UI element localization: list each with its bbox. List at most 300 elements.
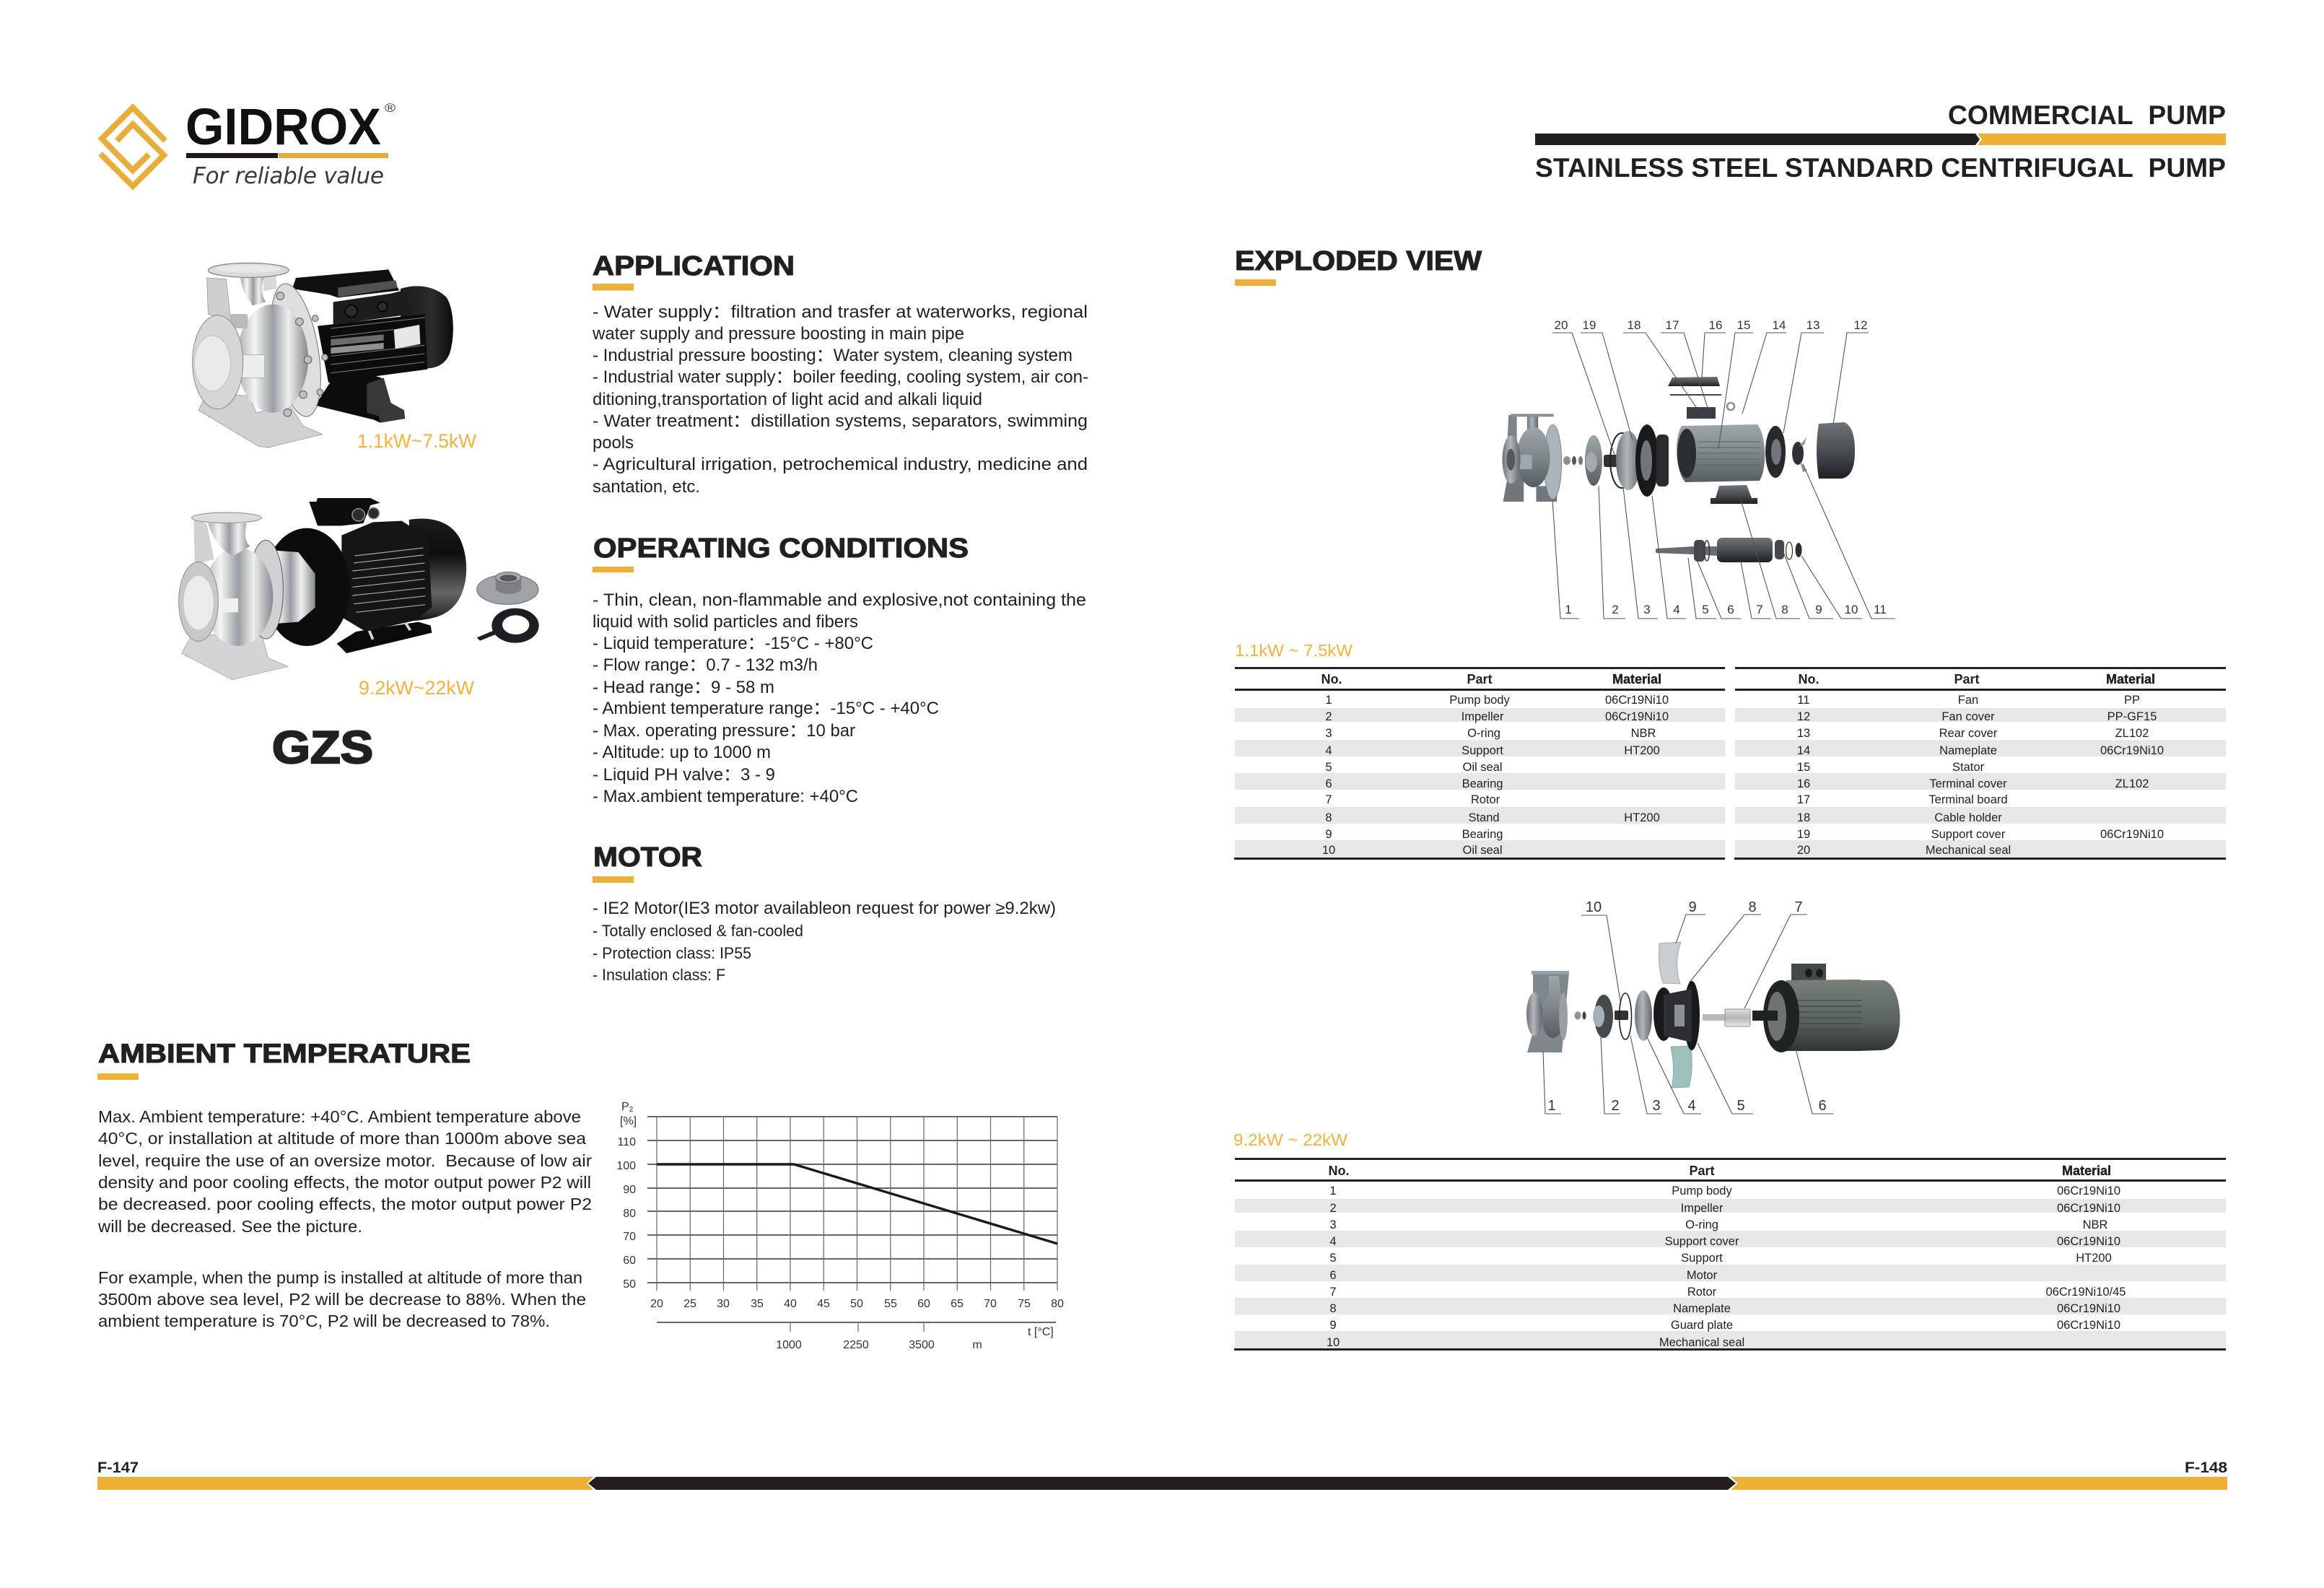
y axis labels: 110 (617, 1136, 636, 1148)
pump casing (1502, 414, 1562, 502)
row 10 (1327, 1336, 1744, 1349)
mechanical seal (1615, 1011, 1628, 1020)
row 7 (1325, 793, 1500, 806)
header row: No. (1328, 1164, 1350, 1178)
row 11 (1797, 694, 2140, 707)
accessory gasket (477, 608, 539, 643)
row 3: O-ring (1685, 1218, 1718, 1231)
paragraph: derating explanation: Max. Ambient temperature: +40°C. Ambient temperature above (98, 1107, 581, 1126)
callout numbers: 18 (1628, 318, 1641, 332)
neck (208, 523, 250, 556)
callout numbers: 1 (1547, 1098, 1556, 1114)
motor (1752, 964, 1900, 1052)
row 7 (1329, 1286, 2126, 1299)
row 4: 06Cr19Ni10 (2057, 1235, 2120, 1248)
application list: - Industrial water supply：boiler feeding, cooling system, air con- (593, 367, 1088, 387)
row 13: Rear cover (1939, 727, 1998, 740)
row 2 (1329, 1202, 2120, 1215)
row 14: 06Cr19Ni10 (2100, 744, 2164, 757)
product photo: large pump 9.2kW-22kW (179, 498, 539, 680)
rear cover (1765, 426, 1786, 478)
row 1: Pump body (1672, 1185, 1732, 1197)
fan (1792, 437, 1807, 472)
power label: 9.2kW~22kW: 9.2kW~22kW (359, 677, 475, 699)
paragraph: example: For example, when the pump is installed at altitude of more than (98, 1268, 582, 1287)
row 8 (1325, 811, 1660, 824)
row 5: Oil seal (1462, 761, 1503, 774)
application list: ditioning,transportation of light acid and alkali liquid (593, 390, 982, 409)
callout numbers: 4 (1673, 603, 1680, 616)
fan cover (1817, 422, 1855, 479)
row 8: Stand (1468, 811, 1500, 824)
header row: Material (1612, 672, 1661, 686)
row 7: Rotor (1471, 793, 1500, 806)
footer (97, 1460, 2227, 1490)
top flange (192, 512, 261, 523)
heading: APPLICATION (593, 251, 795, 282)
header row (1321, 672, 1661, 686)
row 19 (1797, 828, 2164, 841)
row bands (1235, 708, 1725, 858)
conditions list: - Max. operating pressure：10 bar (593, 721, 855, 741)
row 2: 2 (1325, 710, 1332, 723)
row 11: PP (2124, 694, 2140, 707)
inlet pipe (222, 598, 238, 612)
exploded diagram: 9.2kW-22kW (1526, 899, 1900, 1114)
row 19: 06Cr19Ni10 (2100, 828, 2164, 841)
terminal board (1670, 394, 1721, 396)
row 14 (1797, 744, 2164, 757)
row 7: 7 (1329, 1286, 1337, 1299)
altitude axis labels: 2250 (843, 1339, 869, 1351)
impeller (1585, 435, 1602, 486)
row 8: HT200 (1624, 811, 1660, 824)
support (1654, 981, 1700, 1050)
row 17: 17 (1797, 793, 1810, 806)
base (182, 634, 288, 680)
cable holder (1687, 407, 1716, 419)
row 4: 4 (1329, 1235, 1337, 1248)
header row: Material (2106, 672, 2155, 686)
row 9: 9 (1329, 1319, 1337, 1332)
temperature axis labels: 65 (951, 1298, 964, 1310)
row 3: O-ring (1467, 727, 1500, 740)
row 9: Guard plate (1671, 1319, 1733, 1332)
pump casing (1526, 971, 1569, 1052)
row 13: 13 (1797, 727, 1810, 740)
terminal box (309, 498, 380, 525)
table: parts 11-20 (1734, 667, 2226, 860)
row 6 (1329, 1269, 1718, 1282)
product photo: small pump 1.1kW-7.5kW (193, 263, 453, 448)
terminal box (292, 269, 413, 325)
heading accent (593, 284, 634, 290)
temperature axis labels: 50 (850, 1298, 863, 1310)
icon: gold interlocking diamond (100, 108, 165, 186)
row 3: NBR (2083, 1218, 2107, 1231)
conditions list: - Liquid temperature：-15°C - +80°C (593, 634, 873, 653)
rotor assembly (1656, 538, 1801, 562)
temperature axis labels: 20 (650, 1298, 663, 1310)
conditions list: - Head range：9 - 58 m (593, 678, 774, 697)
motor list (593, 899, 1056, 984)
conditions list: - Altitude: up to 1000 m (593, 743, 771, 762)
conditions list: - Thin, clean, non-flammable and explosive,not containing the (593, 590, 1086, 610)
paragraph: derating explanation: 40°C, or installation at altitude of more than 1000m above sea (98, 1129, 586, 1148)
table: parts for 9.2kW-22kW (1234, 1158, 2226, 1351)
temperature axis labels: 40 (784, 1298, 797, 1310)
row 15 (1797, 761, 1985, 774)
volute (204, 547, 273, 646)
callout numbers: 8 (1781, 603, 1788, 616)
row 4 (1329, 1235, 2120, 1248)
row 12: PP-GF15 (2107, 710, 2157, 723)
altitude axis labels (776, 1326, 1054, 1351)
section heading: exploded view (1235, 246, 1482, 286)
page number left: F-147 (97, 1460, 139, 1476)
row 10: Oil seal (1462, 844, 1503, 857)
callout numbers: 15 (1737, 318, 1750, 332)
row 13: ZL102 (2115, 727, 2149, 740)
callout numbers: 13 (1807, 318, 1820, 332)
callout numbers: 10 (1586, 899, 1602, 915)
section: operating conditions (593, 533, 1086, 806)
header: product category (1535, 100, 2226, 183)
row 3: NBR (1631, 727, 1656, 740)
application list: water supply and pressure boosting in main pipe (592, 324, 964, 344)
heading accent (97, 1073, 139, 1080)
row 6: Bearing (1462, 777, 1503, 790)
volute (237, 305, 308, 413)
application list: pools (593, 433, 634, 453)
callout numbers: 19 (1583, 318, 1596, 332)
section: motor (593, 842, 1056, 984)
motor foot (337, 622, 432, 653)
row 17 (1797, 793, 2008, 806)
temperature axis labels: 45 (817, 1298, 830, 1310)
row 10: 10 (1327, 1336, 1340, 1349)
row 10: 10 (1322, 844, 1335, 857)
paragraph: derating explanation: be decreased. poor cooling effects, the motor output power P2 (98, 1195, 592, 1213)
callout numbers: 20 (1555, 318, 1568, 332)
row bands (1235, 1199, 2226, 1349)
heading accent (593, 567, 634, 572)
row 3 (1325, 727, 1656, 740)
motor ribs (331, 318, 424, 373)
paragraph: derating explanation: level, require the use of an oversize motor. Because of low air (98, 1151, 592, 1170)
volute flange (248, 540, 283, 639)
row 2: 2 (1329, 1202, 1337, 1215)
chart grid (647, 1117, 1057, 1291)
row 18: Cable holder (1934, 811, 2002, 824)
temperature axis labels: 80 (1051, 1298, 1064, 1310)
temperature axis labels: 35 (751, 1298, 764, 1310)
row 10 (1322, 844, 1503, 857)
row 6: Motor (1687, 1269, 1718, 1282)
callout numbers: 7 (1794, 899, 1803, 915)
application list: - Water treatment：distillation systems, separators, swimming (593, 411, 1088, 431)
terminal cover (1668, 377, 1720, 386)
row 16: ZL102 (2115, 777, 2149, 790)
y axis labels: 90 (623, 1184, 636, 1196)
row 8 (1329, 1302, 2120, 1315)
temperature axis labels: 70 (984, 1298, 997, 1310)
heading: EXPLODED VIEW (1235, 246, 1482, 276)
temperature axis labels: 75 (1018, 1298, 1031, 1310)
row 2: Impeller (1681, 1202, 1724, 1215)
leader lines (1552, 333, 1895, 619)
altitude axis (657, 1322, 1056, 1332)
leader lines (1543, 915, 1833, 1114)
row 1: 06Cr19Ni10 (2057, 1185, 2120, 1197)
row 8: 8 (1329, 1302, 1337, 1315)
stand (1711, 485, 1757, 504)
section: application (592, 251, 1088, 497)
row 1: 06Cr19Ni10 (1605, 694, 1669, 707)
callout numbers: 3 (1643, 603, 1651, 616)
base (198, 393, 323, 448)
conditions list: - Liquid PH valve：3 - 9 (593, 765, 775, 785)
row 15: 15 (1797, 761, 1810, 774)
row 8: 8 (1325, 811, 1332, 824)
row 5: Support (1681, 1252, 1723, 1265)
application list: - Water supply：filtration and trasfer at waterworks, regional (593, 302, 1088, 322)
row 9: 9 (1325, 828, 1332, 841)
callout numbers: 3 (1652, 1098, 1661, 1114)
header row: Material (2062, 1164, 2111, 1178)
row bands (1735, 708, 2226, 858)
logo rule (186, 153, 388, 158)
support cover (1616, 431, 1641, 490)
application list: santation, etc. (593, 477, 700, 497)
altitude axis labels: m (972, 1339, 982, 1351)
table rules (1234, 1158, 2226, 1351)
row 20 (1797, 844, 2011, 857)
callout numbers: 14 (1773, 318, 1786, 332)
y axis labels: P (621, 1101, 629, 1113)
y axis labels: 80 (623, 1208, 636, 1220)
O-ring (1610, 433, 1633, 488)
motor foot (315, 374, 405, 423)
title: commercial pump: COMMERCIAL PUMP (1948, 100, 2226, 130)
row 6 (1325, 777, 1503, 790)
inlet disc (183, 576, 214, 629)
motor list: - IE2 Motor(IE3 motor availableon request for power ≥9.2kw) (593, 899, 1056, 918)
paragraph: example (98, 1268, 586, 1330)
upper rib (230, 314, 248, 328)
row 14: Nameplate (1939, 744, 1997, 757)
footer bar (97, 1477, 2227, 1490)
mechanical seal (1604, 455, 1622, 467)
header row: No. (1799, 672, 1819, 686)
heading: OPERATING CONDITIONS (593, 533, 969, 564)
back flange (263, 280, 329, 420)
row 2: Impeller (1462, 710, 1504, 723)
callout numbers (1547, 899, 1827, 1114)
small parts (1575, 1012, 1586, 1019)
temperature axis labels: 55 (884, 1298, 897, 1310)
motor fan cover (409, 518, 466, 621)
derating curve (657, 1164, 1057, 1244)
application list (592, 302, 1088, 497)
callout numbers: 11 (1874, 603, 1887, 616)
table: parts 1-10 (1234, 667, 1725, 860)
row 6: 6 (1325, 777, 1332, 790)
row 5: 5 (1329, 1252, 1337, 1265)
motor fan cover (401, 286, 453, 370)
stator (1677, 424, 1765, 482)
row 4: Support cover (1665, 1235, 1739, 1248)
conditions list: liquid with solid particles and fibers (593, 612, 858, 632)
guard plate top (1659, 942, 1681, 984)
model name: GZS: GZS (272, 723, 373, 773)
paragraph: derating explanation (97, 1107, 592, 1236)
bracket (193, 518, 214, 564)
row 11: 11 (1797, 694, 1810, 707)
temperature axis labels: 25 (683, 1298, 696, 1310)
header row (1328, 1164, 2111, 1178)
application list: - Industrial pressure boosting：Water system, cleaning system (593, 346, 1073, 365)
row 7: 06Cr19Ni10/45 (2045, 1286, 2126, 1299)
row 7: 7 (1325, 793, 1332, 806)
support cover (1635, 990, 1652, 1041)
row 4: Support (1462, 744, 1503, 757)
lifting eye (1727, 403, 1734, 410)
application list: - Agricultural irrigation, petrochemical industry, medicine and (593, 455, 1088, 474)
paragraph: example: 3500m above sea level, P2 will be decrease to 88%. When the (98, 1290, 586, 1309)
callout numbers (1555, 318, 1887, 616)
callout numbers: 2 (1611, 1098, 1620, 1114)
logo: GIDROX brand (100, 99, 396, 189)
flange bolts (276, 292, 328, 416)
y axis labels: 100 (616, 1160, 636, 1172)
row 5: HT200 (2076, 1252, 2112, 1265)
row 9: 06Cr19Ni10 (2057, 1319, 2120, 1332)
callout numbers: 5 (1702, 603, 1709, 616)
section: ambient temperature (97, 1039, 592, 1330)
row 16 (1797, 777, 2149, 790)
callout numbers: 1 (1565, 603, 1572, 616)
power label: 1.1kW~7.5kW: 1.1kW~7.5kW (357, 430, 476, 452)
row 12: Fan cover (1941, 710, 1995, 723)
header row (1799, 672, 2155, 686)
callout numbers: 12 (1854, 318, 1867, 332)
motor body (341, 521, 432, 632)
O-ring (1620, 993, 1631, 1039)
y axis labels: [%] (620, 1115, 637, 1127)
motor list: - Insulation class: F (593, 966, 725, 984)
rotor shaft (1703, 1009, 1750, 1026)
table rules (1734, 667, 2226, 860)
y axis labels (616, 1101, 637, 1291)
row 15: Stator (1952, 761, 1985, 774)
inlet flange (193, 315, 243, 409)
altitude axis labels: t [°C] (1028, 1326, 1054, 1338)
wordmark: GIDROX: GIDROX (185, 99, 381, 156)
row 1 (1325, 694, 1669, 707)
row 9 (1325, 828, 1503, 841)
motor flange (263, 528, 350, 646)
y axis labels: 60 (623, 1255, 636, 1267)
row 2 (1325, 710, 1669, 723)
callout numbers: 9 (1688, 899, 1697, 915)
inlet pipe (242, 355, 265, 378)
callout numbers: 6 (1727, 603, 1734, 616)
row 4: 4 (1325, 744, 1332, 757)
range label: 1.1kW ~ 7.5kW: 1.1kW ~ 7.5kW (1235, 641, 1353, 660)
accessory flange (477, 572, 538, 604)
row 10: Mechanical seal (1659, 1336, 1744, 1349)
paragraph: derating explanation: will be decreased. See the picture. (97, 1217, 362, 1236)
row 7: Rotor (1687, 1286, 1717, 1299)
callout numbers: 7 (1756, 603, 1763, 616)
line chart: P2 derating vs temperature and altitude (616, 1101, 1064, 1351)
paragraph: example: ambient temperature is 70°C, P2 will be decreased to 78%. (98, 1312, 550, 1330)
motor list: - Protection class: IP55 (593, 944, 751, 962)
conditions list (593, 590, 1086, 806)
nameplate (394, 325, 420, 349)
row 1 (1329, 1185, 2120, 1197)
altitude axis labels: 1000 (776, 1339, 802, 1351)
temperature axis labels (650, 1298, 1064, 1310)
y axis labels: 70 (623, 1231, 636, 1243)
row 1: 1 (1329, 1185, 1337, 1197)
exploded diagram: 1.1kW-7.5kW (1502, 318, 1895, 619)
registered mark: ® (385, 101, 396, 115)
inlet flange (179, 562, 218, 641)
row 20: 20 (1797, 844, 1810, 857)
callout numbers: 9 (1815, 603, 1822, 616)
row 8: 06Cr19Ni10 (2057, 1302, 2120, 1315)
temperature axis labels: 30 (717, 1298, 730, 1310)
row 11: Fan (1958, 694, 1978, 707)
header bar (1535, 134, 2226, 145)
motor list: - Totally enclosed & fan-cooled (593, 922, 803, 940)
lantern (266, 550, 315, 624)
temperature axis labels: 60 (917, 1298, 930, 1310)
row 2: 06Cr19Ni10 (1605, 710, 1669, 723)
altitude axis labels: 3500 (909, 1339, 935, 1351)
range label: 9.2kW ~ 22kW: 9.2kW ~ 22kW (1233, 1130, 1347, 1149)
row 4: HT200 (1624, 744, 1660, 757)
row 12 (1797, 710, 2157, 723)
motor ribs (352, 548, 425, 612)
row 8: Nameplate (1673, 1302, 1731, 1315)
row 5: 5 (1325, 761, 1332, 774)
row 3: 3 (1329, 1218, 1337, 1231)
motor body (318, 314, 427, 383)
row 16: Terminal cover (1929, 777, 2007, 790)
header row: Part (1467, 672, 1493, 686)
y axis labels: 50 (623, 1278, 636, 1291)
row 5 (1329, 1252, 2112, 1265)
row 12: 12 (1797, 710, 1810, 723)
callout numbers: 6 (1818, 1098, 1827, 1114)
row 1: 1 (1325, 694, 1332, 707)
row 1: Pump body (1449, 694, 1510, 707)
y axis labels: 2 (629, 1106, 634, 1114)
conditions list: - Flow range：0.7 - 132 m3/h (593, 655, 818, 675)
small impeller bits (1563, 456, 1583, 465)
callout numbers: 5 (1737, 1098, 1745, 1114)
conditions list: - Ambient temperature range：-15°C - +40°C (593, 699, 939, 718)
row 20: Mechanical seal (1926, 844, 2011, 857)
heading: AMBIENT TEMPERATURE (98, 1039, 471, 1068)
row 19: Support cover (1931, 828, 2006, 841)
callout numbers: 8 (1748, 899, 1757, 915)
page number right: F-148 (2185, 1460, 2227, 1476)
paragraph: derating explanation: density and poor cooling effects, the motor output power P2 will (98, 1173, 591, 1192)
